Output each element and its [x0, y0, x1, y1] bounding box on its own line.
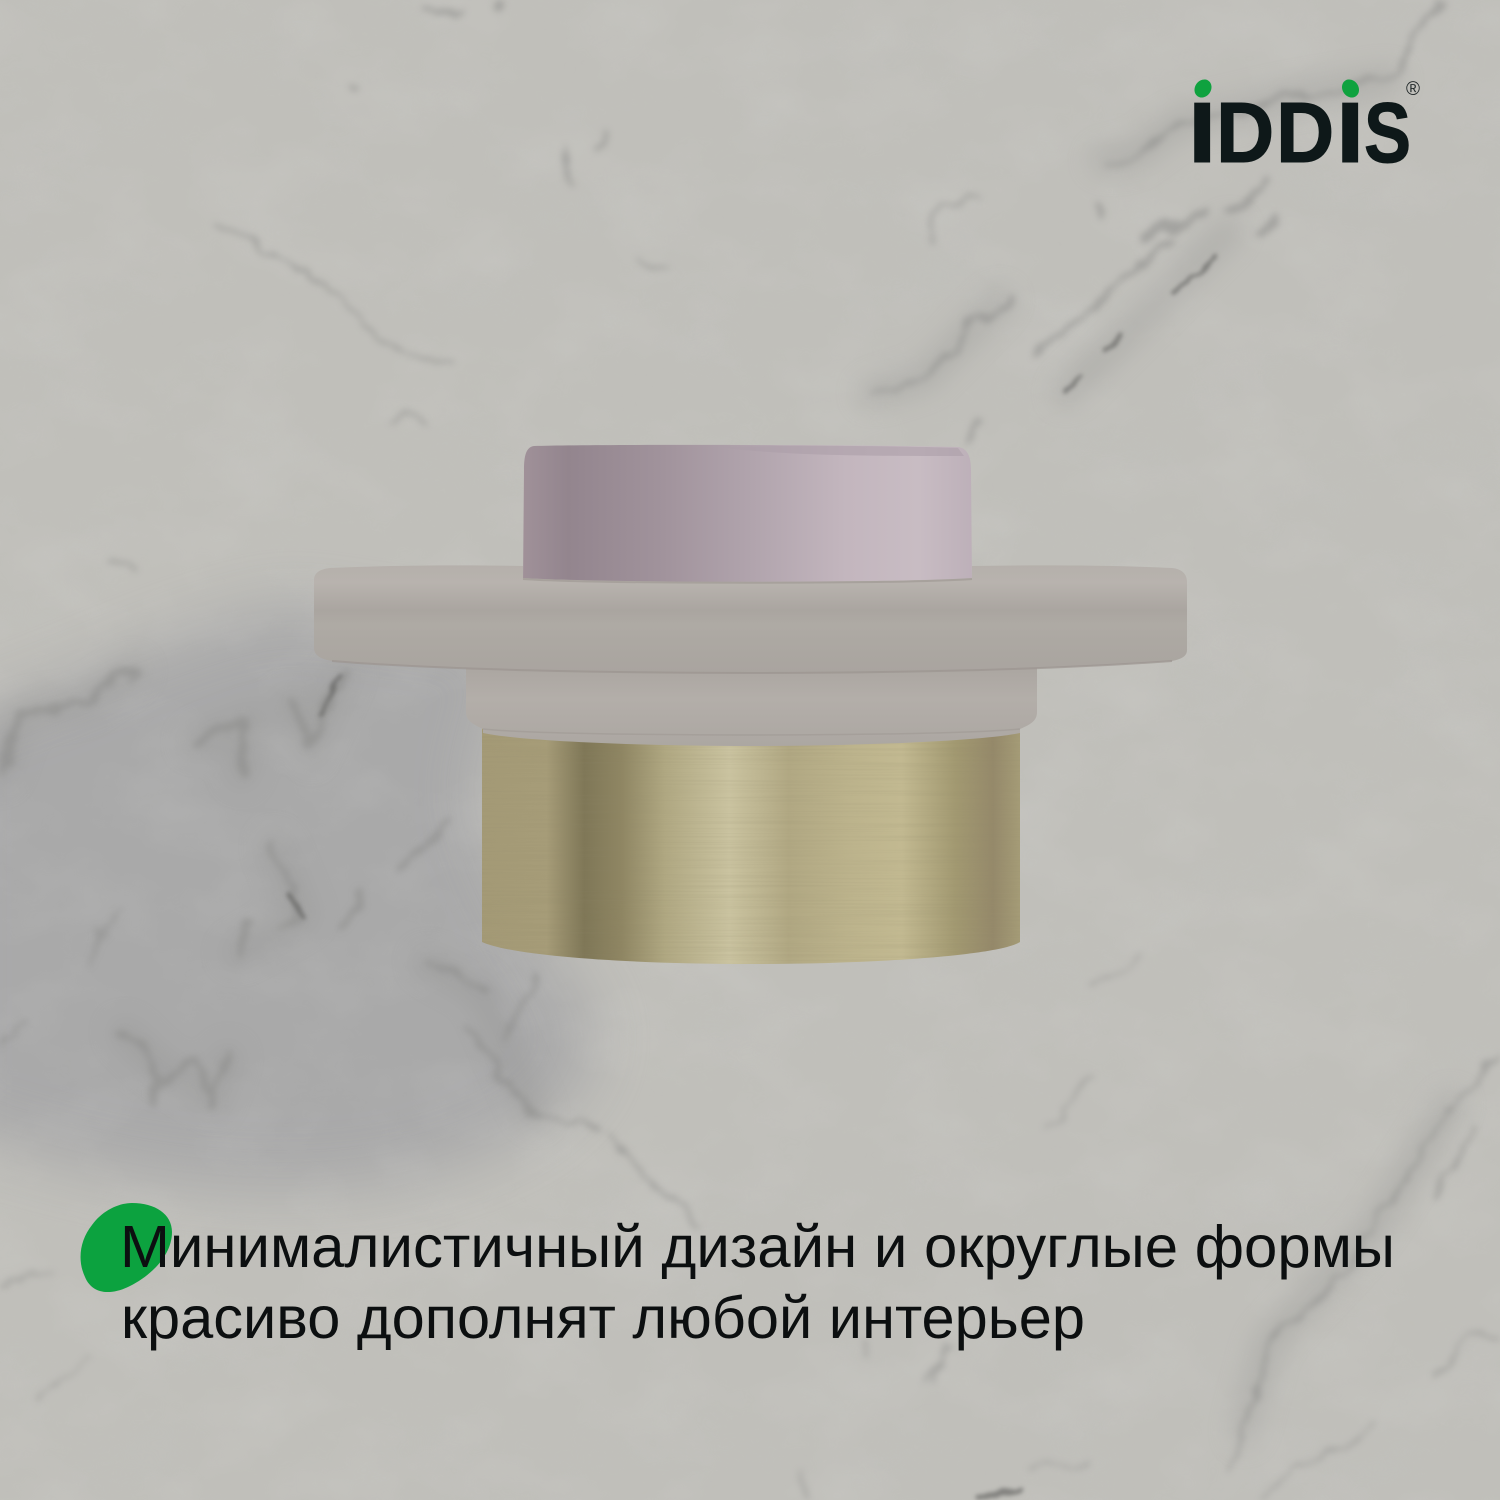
caption line 2: красиво дополнят любой интерьер	[121, 1285, 1085, 1351]
logo: IDDIS: D	[1276, 85, 1334, 180]
caption line 1: Минималистичный дизайн и округлые формы	[120, 1214, 1395, 1280]
frosted glass dish	[314, 565, 1187, 673]
logo: IDDIS	[1188, 85, 1411, 180]
logo: IDDIS: D	[1216, 85, 1274, 180]
logo: IDDIS: I	[1188, 85, 1216, 180]
logo: IDDIS: I	[1336, 85, 1364, 180]
green accent blob	[81, 1203, 172, 1292]
wall shadow	[0, 605, 594, 1190]
logo: IDDIS: S	[1364, 85, 1411, 180]
caption text	[120, 1214, 1395, 1351]
registered mark: ®	[1406, 79, 1420, 100]
brass holder	[482, 725, 1020, 965]
logo green dots	[1191, 76, 1363, 101]
frosted neck	[466, 660, 1037, 746]
product: soap dish	[314, 445, 1187, 965]
soap bar	[523, 445, 972, 582]
